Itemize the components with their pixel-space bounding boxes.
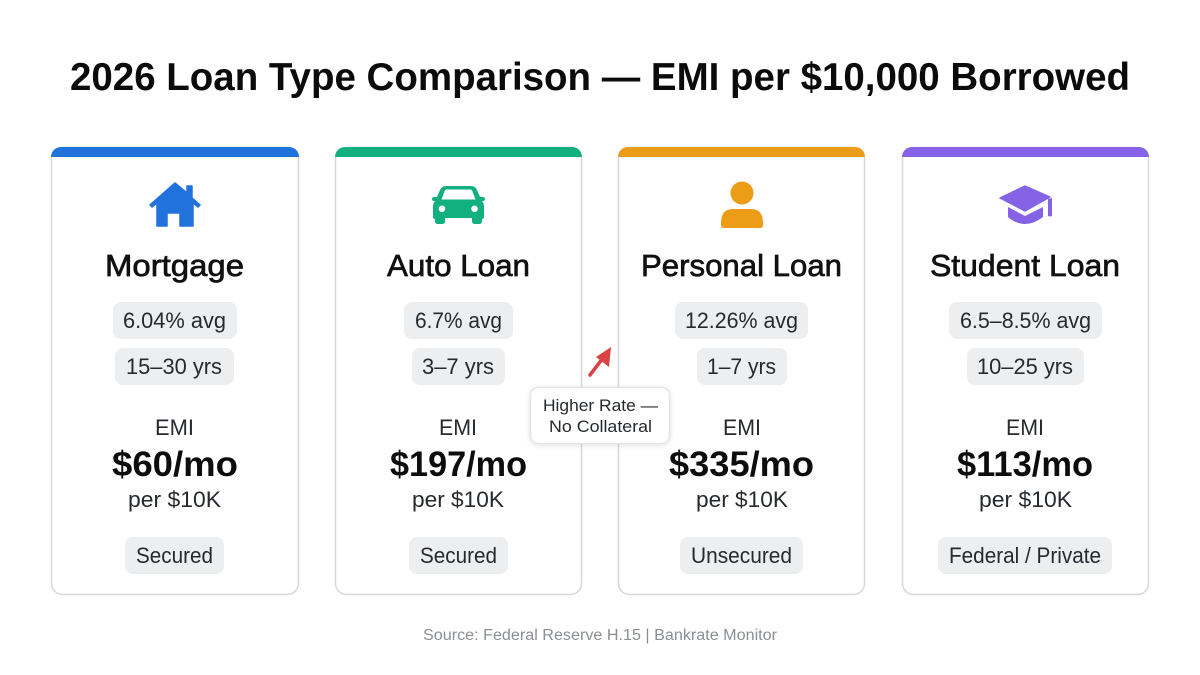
arrow: rising rate bbox=[590, 347, 611, 375]
type pill: Unsecured bbox=[691, 543, 792, 568]
icon: graduation cap bbox=[1000, 186, 1052, 224]
rate pill: 6.04% avg bbox=[123, 308, 226, 333]
per $10K: per $10K bbox=[128, 487, 221, 512]
panel: auto loan bbox=[335, 147, 582, 594]
rate pill: 12.26% avg bbox=[685, 308, 798, 333]
heading: personal loan: Personal Loan bbox=[641, 248, 842, 283]
term pill bbox=[412, 348, 505, 385]
per $10K: per $10K bbox=[979, 487, 1072, 512]
type pill bbox=[409, 537, 508, 574]
EMI value: $60/mo bbox=[112, 445, 238, 484]
heading: mortgage: Mortgage bbox=[105, 248, 244, 283]
rate pill: 6.7% avg bbox=[415, 308, 502, 333]
callout: higher rate bbox=[530, 388, 670, 444]
rate pill bbox=[404, 302, 513, 339]
panel: mortgage bbox=[51, 147, 299, 594]
type pill bbox=[938, 537, 1112, 574]
per $10K: per $10K bbox=[412, 487, 504, 512]
heading: student loan: Student Loan bbox=[930, 248, 1120, 283]
callout: higher rate: Higher Rate — bbox=[543, 396, 658, 415]
EMI value: $113/mo bbox=[957, 445, 1093, 484]
term pill bbox=[697, 348, 787, 385]
EMI label: EMI bbox=[723, 415, 761, 440]
rate pill bbox=[113, 302, 237, 339]
term pill bbox=[967, 348, 1084, 385]
EMI label: EMI bbox=[439, 415, 477, 440]
title: 2026 Loan Type Comparison — EMI per $10,000 Borrowed bbox=[70, 56, 1130, 99]
heading: auto loan: Auto Loan bbox=[387, 248, 530, 283]
rate pill bbox=[949, 302, 1102, 339]
type pill: Secured bbox=[136, 543, 213, 568]
term pill: 1–7 yrs bbox=[707, 354, 776, 379]
term pill: 15–30 yrs bbox=[126, 354, 222, 379]
icon: person bbox=[721, 182, 763, 228]
panel: student loan bbox=[902, 147, 1149, 594]
EMI label: EMI bbox=[1006, 415, 1044, 440]
EMI label: EMI bbox=[155, 415, 194, 440]
rate pill: 6.5–8.5% avg bbox=[960, 308, 1091, 333]
type pill: Federal / Private bbox=[949, 543, 1101, 568]
type pill bbox=[125, 537, 224, 574]
term pill: 3–7 yrs bbox=[422, 354, 494, 379]
rate pill bbox=[675, 302, 808, 339]
type pill: Secured bbox=[420, 543, 497, 568]
per $10K: per $10K bbox=[696, 487, 788, 512]
term pill bbox=[115, 348, 234, 385]
callout: higher rate: No Collateral bbox=[549, 417, 652, 436]
term pill: 10–25 yrs bbox=[977, 354, 1073, 379]
source note: Source: Federal Reserve H.15 | Bankrate Monitor bbox=[423, 627, 777, 644]
icon: house bbox=[150, 183, 200, 226]
EMI value: $335/mo bbox=[669, 445, 814, 484]
icon: car bbox=[432, 186, 485, 224]
type pill bbox=[680, 537, 803, 574]
panel: personal loan bbox=[618, 147, 865, 594]
EMI value: $197/mo bbox=[390, 445, 527, 484]
